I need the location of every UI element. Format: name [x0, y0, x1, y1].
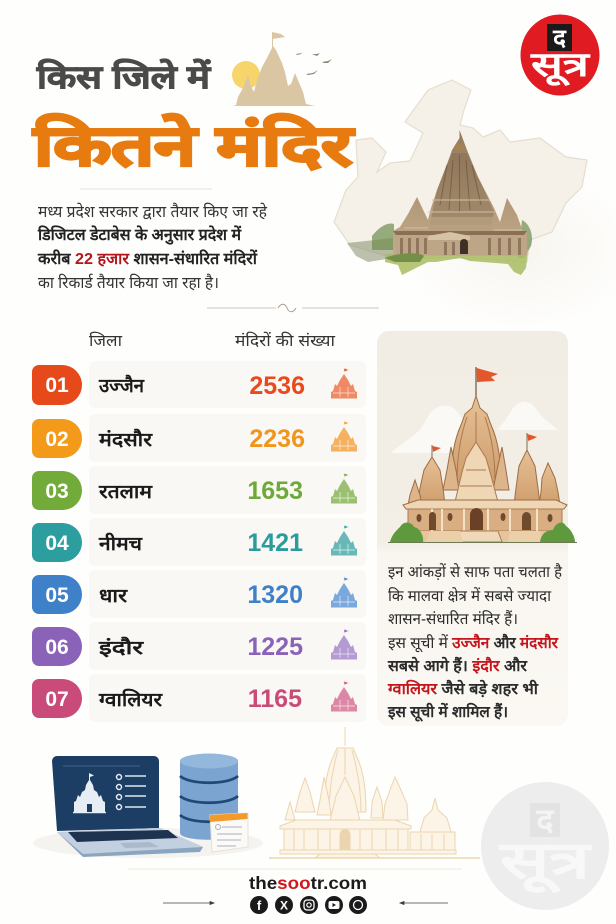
- panel text: इस सूची में उज्जैन और मंदसौर: [388, 633, 559, 653]
- title line 2: कितने मंदिर: [33, 113, 355, 177]
- intro paragraph: मध्य प्रदेश सरकार द्वारा तैयार किए जा रहे: [38, 202, 267, 221]
- panel text: ग्वालियर जैसे बड़े शहर भी: [387, 679, 539, 698]
- row 05 धार: धार: [99, 586, 128, 607]
- row 04 नीमच: [32, 518, 366, 566]
- intro paragraph: डिजिटल डेटाबेस के अनुसार प्रदेश में: [37, 225, 242, 245]
- row 05 धार: [32, 570, 366, 618]
- panel text: [387, 563, 563, 722]
- row 04 नीमच: नीमच: [98, 532, 143, 555]
- social icons: X: [280, 898, 288, 912]
- icon: temple line drawing: [269, 727, 480, 858]
- intro paragraph: का रिकार्ड तैयार किया जा रहा है।: [38, 273, 219, 292]
- row 03 रतलाम: 1653: [247, 477, 303, 505]
- row 01 उज्जैन: 2536: [249, 372, 305, 400]
- row 06 इंदौर: 06: [45, 636, 69, 659]
- panel text: इन आंकड़ों से साफ पता चलता है: [388, 563, 563, 581]
- row 07 ग्वालियर: 07: [45, 688, 69, 711]
- footer rule: [128, 868, 462, 870]
- row 02 मंदसौर: मंदसौर: [98, 428, 153, 451]
- icon: database cylinder: [180, 754, 238, 840]
- row 07 ग्वालियर: 1165: [248, 685, 302, 713]
- icon: temple silhouette with sun and birds: [232, 32, 332, 106]
- row 04 नीमच: 04: [45, 532, 69, 555]
- row 02 मंदसौर: 02: [45, 428, 69, 451]
- row 05 धार: 1320: [247, 581, 303, 609]
- intro paragraph: करीब 22 हजार शासन-संधारित मंदिरों: [37, 249, 258, 268]
- row 02 मंदसौर: [32, 414, 366, 462]
- arrows: [163, 902, 448, 904]
- social icons: [250, 896, 367, 914]
- table column headers: जिला: [89, 331, 123, 350]
- website address: thesootr.com: [249, 873, 367, 893]
- table column headers: [89, 331, 336, 350]
- decorative rule under title: [80, 188, 212, 190]
- icon: illustrated temple: [388, 367, 577, 542]
- watermark logo: सूत्र: [499, 832, 593, 894]
- clouds: [391, 402, 558, 453]
- table column headers: मंदिरों की संख्या: [235, 331, 336, 350]
- row 06 इंदौर: 1225: [247, 633, 303, 661]
- row 03 रतलाम: 03: [45, 480, 69, 503]
- row 06 इंदौर: [32, 622, 366, 670]
- watermark logo: [481, 782, 609, 910]
- row 02 मंदसौर: 2236: [249, 425, 305, 453]
- row 01 उज्जैन: उज्जैन: [98, 374, 145, 397]
- row 06 इंदौर: इंदौर: [98, 636, 145, 659]
- panel: insight with temple illustration: [377, 331, 577, 726]
- ornamental divider: [207, 304, 379, 312]
- hero temple photo: [347, 130, 532, 275]
- row 07 ग्वालियर: [32, 674, 366, 722]
- row 07 ग्वालियर: ग्वालियर: [98, 688, 163, 711]
- row 03 रतलाम: [32, 466, 366, 514]
- row 04 नीमच: 1421: [247, 529, 303, 557]
- social icons: f: [257, 898, 262, 913]
- logo: द सूत्र: सूत्र: [530, 46, 591, 87]
- row 03 रतलाम: रतलाम: [98, 482, 153, 503]
- row 01 उज्जैन: 01: [45, 374, 69, 397]
- watermark logo: द: [536, 802, 554, 838]
- panel text: शासन-संधारित मंदिर हैं।: [388, 610, 518, 628]
- map of Madhya Pradesh: [334, 80, 587, 262]
- panel text: इस सूची में शामिल हैं।: [387, 702, 508, 722]
- map background wash: [400, 170, 616, 330]
- title line 1: किस जिले में: [36, 58, 212, 95]
- intro paragraph: [37, 202, 267, 292]
- icon: laptop with temple records: [33, 756, 263, 858]
- panel text: सबसे आगे हैं। इंदौर और: [387, 656, 528, 675]
- panel text: कि मालवा क्षेत्र में सबसे ज्यादा: [388, 587, 552, 605]
- logo: द सूत्र: द: [552, 25, 567, 52]
- row 01 उज्जैन: [32, 361, 366, 408]
- row 05 धार: 05: [45, 584, 69, 607]
- icon: record card: [210, 813, 248, 852]
- logo: द सूत्र: [520, 14, 600, 96]
